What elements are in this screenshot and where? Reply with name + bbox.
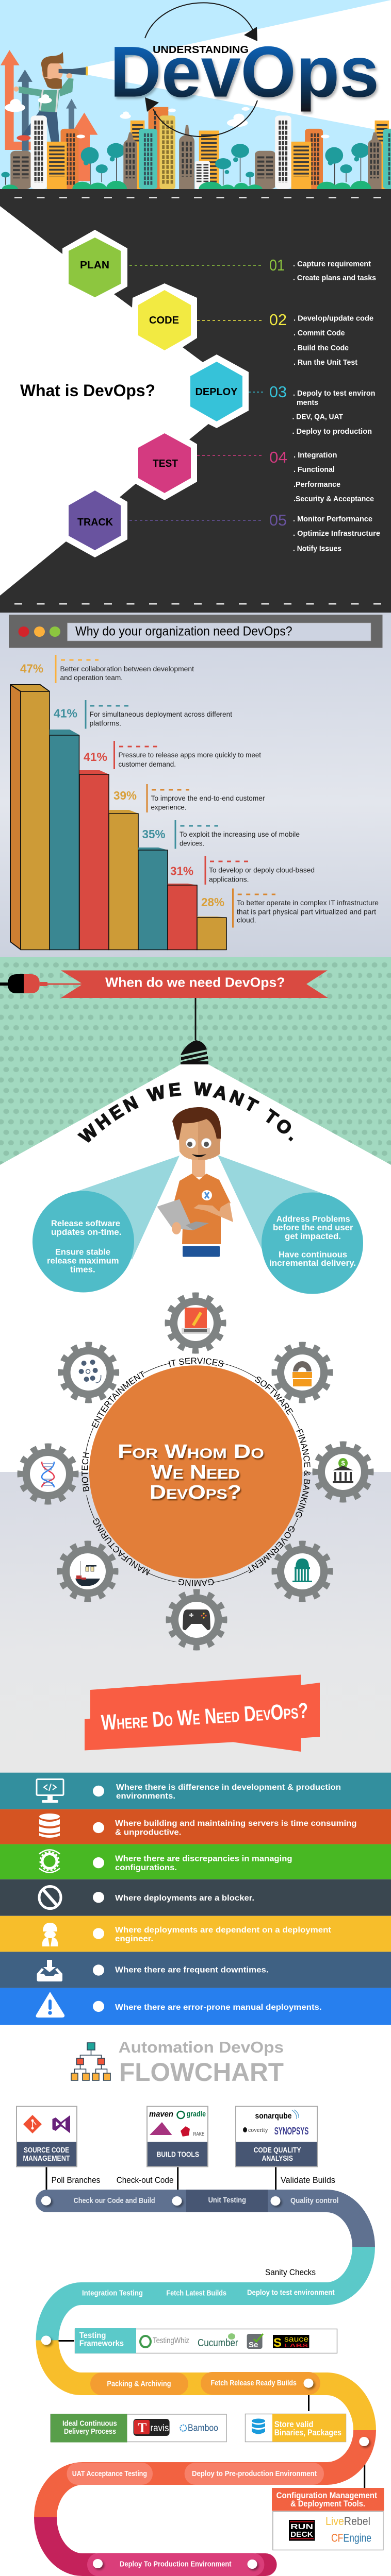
main title DevOps: DevOps xyxy=(110,31,379,112)
gear: manufacturing xyxy=(57,1540,119,1602)
industry ring: IT SERVICES xyxy=(168,1358,224,1367)
heading: for whom do we need DevOps: For Whom Do xyxy=(118,1441,264,1463)
box: configuration management: LiveRebel xyxy=(325,2515,370,2528)
stat 31%: 31% xyxy=(170,865,193,878)
row: manual deployments xyxy=(0,1988,391,2025)
step 02: . Commit Code xyxy=(294,329,345,337)
banner: where do we need DevOps xyxy=(85,1674,320,1752)
stat 39%: To improve the end-to-end customer xyxy=(151,794,265,802)
panel: header sky and city xyxy=(0,0,391,189)
box: code quality analysis: sonarqube xyxy=(255,2112,292,2121)
callout: right: incremental delivery. xyxy=(269,1258,356,1268)
panel: what is DevOps road xyxy=(0,189,391,613)
box: build tools: gradle xyxy=(187,2110,206,2119)
callout cones xyxy=(77,1155,322,1260)
box: store binaries xyxy=(246,2414,346,2442)
hexagon: code xyxy=(138,290,191,350)
callout: right: Have continuous xyxy=(279,1250,347,1260)
step labels: Check-out Code xyxy=(117,2176,173,2185)
box: source code management: MANAGEMENT xyxy=(23,2154,70,2163)
step 04: . Integration xyxy=(294,451,337,460)
stage: source to quality: Unit Testing xyxy=(208,2196,246,2205)
hexagon: deploy: DEPLOY xyxy=(195,386,238,398)
row: servers: & unproductive. xyxy=(115,1828,181,1837)
stat 31% xyxy=(170,856,315,885)
box: configuration management: & Deployment Tools. xyxy=(290,2499,365,2509)
stage: source to quality: Check our Code and Build xyxy=(74,2197,155,2205)
stat 39%: experience. xyxy=(151,803,187,811)
figure: developer with laptop xyxy=(157,1107,233,1257)
step 03: ments xyxy=(297,399,318,407)
row: deployment engineer: Where deployments are dependent on a deployment xyxy=(115,1926,332,1935)
stage: source to quality xyxy=(41,2190,338,2212)
stat 28% xyxy=(201,888,379,927)
row: manual deployments: Where there are error-prone manual deployments. xyxy=(115,2003,322,2012)
gear: finance: $ xyxy=(341,1459,346,1467)
row: environments: environments. xyxy=(116,1792,175,1801)
callout: left: times. xyxy=(70,1265,95,1275)
box: testing frameworks: TestingWhiz xyxy=(153,2336,189,2345)
step 01: . Create plans and tasks xyxy=(293,274,376,282)
gear: entertainment xyxy=(58,1342,119,1403)
step 02: . Build the Code xyxy=(294,344,349,352)
step 03: . Deploy to production xyxy=(292,428,372,436)
flowchart heading: Automation DevOps xyxy=(119,2038,284,2056)
box: source code management: SOURCE CODE xyxy=(24,2146,69,2155)
industry ring: BIOTECH xyxy=(82,1452,90,1492)
stat 41% teal xyxy=(54,700,232,728)
box: configuration management xyxy=(272,2488,384,2550)
stage: production xyxy=(87,2553,264,2576)
step labels: Sanity Checks xyxy=(265,2268,316,2277)
panel: automation DevOps flowchart xyxy=(17,2038,384,2576)
stat 39% xyxy=(113,784,265,812)
callout: right: Address Problems xyxy=(276,1214,350,1224)
step 02: . Develop/update code xyxy=(294,314,373,323)
orange centre circle xyxy=(89,1365,302,1579)
stat 35%: devices. xyxy=(180,839,204,847)
stat 28%: cloud. xyxy=(237,916,256,924)
stage: testing xyxy=(82,2289,335,2298)
step 03 xyxy=(249,383,376,436)
stat 39%: 39% xyxy=(113,789,137,802)
step labels xyxy=(52,2176,335,2277)
stat 35%: 35% xyxy=(142,827,165,841)
row: servers: Where building and maintaining servers is time consuming xyxy=(115,1819,357,1828)
row: configurations: configurations. xyxy=(115,1863,177,1872)
heading: for whom do we need DevOps: DevOps? xyxy=(150,1482,241,1503)
3D bar chart xyxy=(10,685,226,950)
industry ring: GAMING xyxy=(178,1579,214,1586)
industry ring xyxy=(82,1358,311,1586)
stage: production: Deploy To Production Environment xyxy=(120,2560,232,2569)
box: store binaries: Binaries, Packages xyxy=(274,2428,341,2437)
box: build tools: RAKE xyxy=(193,2131,204,2138)
stat 41% teal: For simultaneous deployment across different xyxy=(90,710,232,718)
box: ideal continuous delivery: Ideal Continuous xyxy=(62,2419,117,2428)
banner: where do we need DevOps: Where Do We Need DevOps? xyxy=(101,1698,309,1735)
panel: for whom do we need DevOps xyxy=(0,1292,391,1773)
stage: testing: Fetch Latest Builds xyxy=(166,2290,226,2298)
flowchart heading xyxy=(119,2038,284,2087)
box: testing frameworks: Frameworks xyxy=(79,2339,124,2348)
stage: packaging: Fetch Release Ready Builds xyxy=(210,2379,297,2387)
callout: left: Release software xyxy=(51,1218,120,1228)
panel: when do we need DevOps: WHEN WE WANT TO. xyxy=(77,1081,293,1143)
industry ring: MANUFACTURING xyxy=(93,1518,150,1575)
stat 35% xyxy=(142,820,300,849)
step 03: . DEV, QA, UAT xyxy=(292,413,343,421)
industry ring: ENTERTAINMENT xyxy=(91,1370,144,1428)
callout: left: release maximum xyxy=(47,1256,119,1265)
stage: packaging: Packing & Archiving xyxy=(107,2380,171,2388)
box: ideal continuous delivery: Delivery Process xyxy=(64,2427,116,2436)
step 02 xyxy=(197,311,373,367)
hexagon: deploy xyxy=(190,362,242,421)
hexagon: track: TRACK xyxy=(77,517,113,528)
box: code quality analysis xyxy=(236,2106,317,2167)
callout: left: updates on-time. xyxy=(51,1227,122,1237)
step 02: . Run the Unit Test xyxy=(294,359,357,367)
step 01: 01 xyxy=(269,256,285,274)
box: testing frameworks: LABS xyxy=(284,2343,308,2349)
row: environments: Where there is difference in development & production xyxy=(116,1783,341,1792)
step 04: 04 xyxy=(269,448,287,466)
box: testing frameworks xyxy=(75,2328,337,2353)
step 04: .Performance xyxy=(294,481,340,489)
stat 47%: and operation team. xyxy=(60,673,123,682)
box: build tools xyxy=(147,2106,208,2167)
heading: for whom do we need DevOps: We Need xyxy=(151,1462,240,1483)
box: code quality analysis: SYNOPSYS xyxy=(274,2126,308,2137)
stat 47%: 47% xyxy=(20,662,43,675)
stage: source to quality: Quality control xyxy=(290,2197,338,2205)
stat 41% red: customer demand. xyxy=(119,760,176,768)
step labels: Poll Branches xyxy=(52,2176,100,2185)
hexagon: plan xyxy=(69,238,121,297)
stat 47% xyxy=(20,655,194,683)
gear: finance xyxy=(312,1441,374,1503)
hexagon: plan: PLAN xyxy=(80,260,109,271)
row: blocker: Where deployments are a blocker. xyxy=(115,1894,254,1903)
stage: testing: Deploy to test environment xyxy=(247,2289,335,2297)
step 05 xyxy=(129,511,380,553)
cycle arrows xyxy=(145,3,257,137)
step 04 xyxy=(197,448,374,503)
industry ring: GOVERNMENT xyxy=(248,1526,295,1573)
browser style heading bar xyxy=(9,615,383,648)
pipeline road xyxy=(45,2201,365,2565)
row: downtimes: Where there are frequent downtimes. xyxy=(115,1965,269,1974)
step 01 xyxy=(129,256,376,282)
box: ideal continuous delivery: T xyxy=(138,2420,146,2435)
stage: pre-production: UAT Acceptance Testing xyxy=(72,2469,147,2478)
hexagon: test xyxy=(138,433,191,493)
stat 41% teal: platforms. xyxy=(90,719,121,727)
stat 31%: To develop or depoly cloud-based xyxy=(209,866,315,874)
icon: org chart xyxy=(71,2043,110,2080)
hexagon: track xyxy=(69,490,121,550)
callout: right xyxy=(262,1192,363,1294)
stat 47%: Better collaboration between development xyxy=(60,665,194,673)
browser style heading bar: Why do your organization need DevOps? xyxy=(75,624,292,639)
gear: biotech xyxy=(17,1443,79,1505)
row: downtimes xyxy=(0,1952,391,1988)
step labels: Validate Builds xyxy=(281,2176,335,2185)
stat 41% red xyxy=(84,741,261,769)
stat 41% red: Pressure to release apps more quickly to meet xyxy=(119,751,261,759)
stat 28%: 28% xyxy=(201,895,224,909)
stat 31%: applications. xyxy=(209,875,249,883)
icon: hanging lamp xyxy=(181,998,208,1064)
step 01: . Capture requirement xyxy=(293,260,371,268)
box: ideal continuous delivery: ravis xyxy=(151,2423,169,2434)
box: testing frameworks: Cucumber xyxy=(198,2337,238,2349)
callout: right: before the end user xyxy=(273,1223,353,1232)
ribbon heading: When do we need DevOps? xyxy=(105,975,285,990)
icon: plug xyxy=(0,974,84,993)
gear: government xyxy=(271,1540,333,1602)
city skyline and hero xyxy=(1,50,391,189)
box: source code management xyxy=(17,2106,77,2167)
industry ring: FINANCE & BANKING xyxy=(296,1429,311,1518)
step 05: . Notify Issues xyxy=(293,545,341,553)
callout: right: get impacted. xyxy=(285,1231,341,1241)
pipeline node dots xyxy=(41,2336,369,2569)
light beam xyxy=(87,0,391,132)
stat 28%: that is part physical part virtualized and part xyxy=(237,908,376,916)
gear: software xyxy=(271,1342,333,1403)
row: deployment engineer xyxy=(0,1916,391,1952)
box: configuration management: RUN xyxy=(290,2522,313,2531)
step 03: 03 xyxy=(269,383,287,401)
box: build tools: BUILD TOOLS xyxy=(157,2150,199,2159)
stage: pre-production: Deploy to Pre-production Environment xyxy=(192,2469,317,2478)
stage: packaging xyxy=(90,2372,320,2395)
box: code quality analysis: CODE QUALITY xyxy=(254,2146,301,2155)
panel: where do we need DevOps list xyxy=(0,1773,391,2025)
row: configurations xyxy=(0,1844,391,1879)
step 05: . Optimize Infrastructure xyxy=(293,530,380,538)
step 05: . Monitor Performance xyxy=(293,515,372,523)
heading: for whom do we need DevOps xyxy=(118,1441,264,1503)
stage: testing: Integration Testing xyxy=(82,2290,143,2298)
curved heading: when we want to xyxy=(83,1095,304,1154)
flowchart heading: FLOWCHART xyxy=(119,2058,284,2087)
step 03: . Depoly to test environ xyxy=(293,389,376,398)
step 04: .Security & Acceptance xyxy=(294,495,374,503)
stat 28%: To better operate in complex IT infrastructure xyxy=(237,899,379,907)
box: build tools: maven xyxy=(149,2110,173,2119)
row: configurations: Where there are discrepancies in managing xyxy=(115,1854,292,1863)
box: testing frameworks: Testing xyxy=(79,2331,106,2340)
box: code quality analysis: coverity xyxy=(248,2126,268,2133)
heading: what is DevOps: What is DevOps? xyxy=(20,381,155,400)
connector lines xyxy=(46,2166,365,2576)
row: deployment engineer: engineer. xyxy=(115,1935,153,1943)
industry ring: SOFTWARE xyxy=(255,1377,293,1415)
panel: why your organization needs DevOps xyxy=(0,613,391,958)
callout: left xyxy=(32,1191,134,1292)
row: servers xyxy=(0,1809,391,1844)
gear: IT services xyxy=(165,1292,226,1354)
box: ideal continuous delivery: Bamboo xyxy=(188,2422,218,2433)
box: configuration management: CFEngine xyxy=(331,2531,371,2544)
title kicker: UNDERSTANDING xyxy=(153,44,249,56)
gear: gaming xyxy=(166,1589,227,1651)
box: testing frameworks: sauce xyxy=(284,2335,308,2344)
box: store binaries: Store valid xyxy=(274,2419,314,2429)
ribbon heading xyxy=(61,971,328,998)
stage: pre-production xyxy=(67,2463,324,2485)
row: blocker xyxy=(0,1879,391,1916)
box: testing frameworks: S xyxy=(273,2336,282,2350)
panel: when do we need DevOps xyxy=(0,957,391,1294)
stat 41% teal: 41% xyxy=(54,707,77,720)
hexagon: test: TEST xyxy=(153,458,178,469)
box: ideal continuous delivery xyxy=(51,2414,226,2443)
row: environments xyxy=(0,1773,391,1809)
step 04: . Functional xyxy=(294,466,335,474)
box: testing frameworks: Se xyxy=(249,2341,258,2349)
step 02: 02 xyxy=(269,311,287,329)
stat 41% red: 41% xyxy=(84,750,107,764)
step 05: 05 xyxy=(269,511,287,529)
stat 35%: To exploit the increasing use of mobile xyxy=(180,830,300,838)
box: configuration management: DECK xyxy=(290,2530,313,2539)
box: code quality analysis: ANALYSIS xyxy=(262,2154,293,2163)
callout: left: Ensure stable xyxy=(55,1247,110,1257)
box: configuration management: Configuration Management xyxy=(276,2491,377,2500)
hexagon: code: CODE xyxy=(149,315,179,326)
